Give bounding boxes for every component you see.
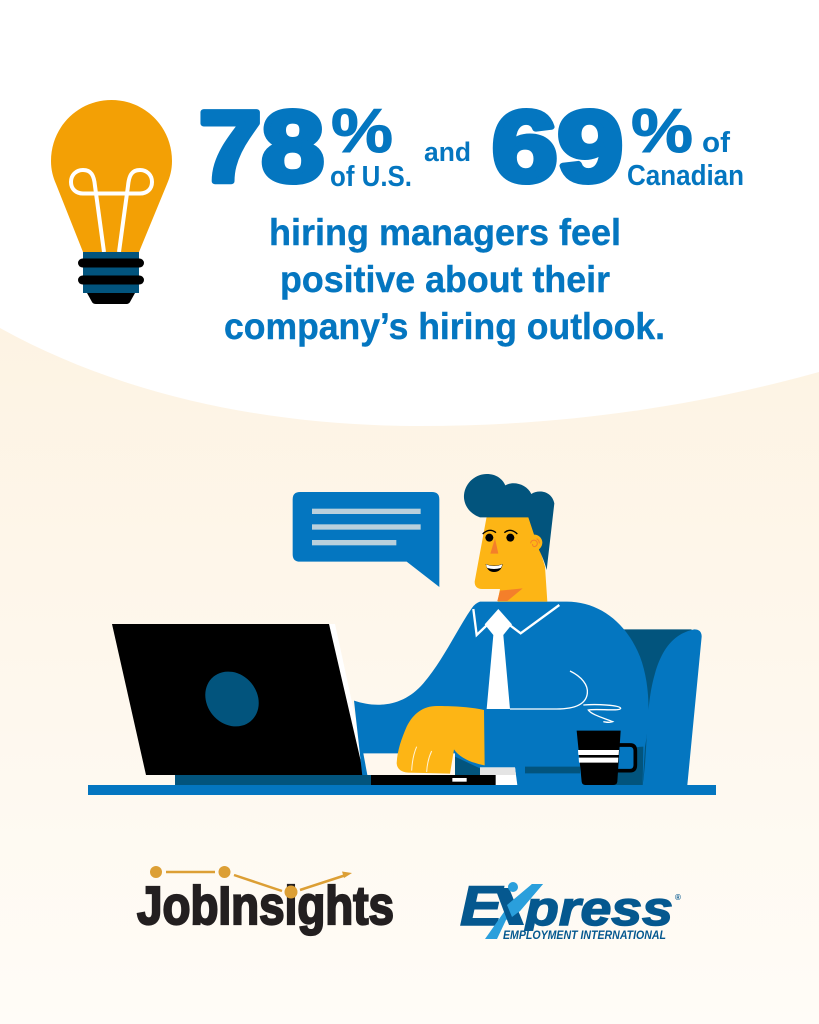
- logo: JobInsights: JobInsights: [137, 876, 394, 936]
- headline statistic: 69% of Canadian: %: [631, 97, 693, 166]
- collar and sleeve lines: [473, 605, 621, 722]
- dark under-arm shade: [455, 747, 643, 785]
- subheading text: [224, 212, 665, 347]
- illustration: man at laptop: [88, 474, 716, 795]
- headline statistic: 69% of Canadian: 69: [492, 91, 623, 203]
- shirt cuff: [363, 753, 455, 775]
- speech bubble: [293, 492, 439, 587]
- coffee mug: [577, 731, 635, 785]
- logo: Express Employment International: [460, 882, 681, 939]
- man figure: [175, 474, 702, 785]
- headline statistic: 78% of U.S.: %: [331, 97, 393, 166]
- headline statistic: 78% of U.S.: 78: [199, 91, 324, 203]
- hand: [397, 706, 485, 774]
- desk: [88, 785, 716, 795]
- headline statistic: 78% of U.S.: [199, 91, 412, 203]
- headline statistic: 69% of Canadian: Canadian: [627, 160, 744, 192]
- headline statistic: 69% of Canadian: [492, 91, 744, 203]
- logo: Express Employment International: press: [523, 883, 673, 936]
- subheading text: company’s hiring outlook.: [224, 306, 665, 347]
- chair: [613, 629, 702, 785]
- neck and face: [475, 517, 547, 602]
- keyboard: [175, 775, 496, 785]
- torso and arm: [354, 602, 649, 785]
- neck shadow: [497, 588, 523, 601]
- laptop screen: [112, 624, 368, 776]
- logo: Express Employment International: E: [460, 874, 504, 937]
- headline statistic: 69% of Canadian: of: [702, 127, 730, 159]
- eyes, brows, nose and mouth: [483, 530, 517, 572]
- hair: [464, 474, 554, 570]
- subheading text: hiring managers feel: [269, 212, 621, 253]
- subheading text: positive about their: [280, 259, 610, 300]
- icon: light bulb: [51, 100, 172, 304]
- logo: Express Employment International: EMPLOYMENT INTERNATIONAL: [503, 930, 666, 942]
- logo: Express Employment International: ®: [675, 893, 681, 902]
- headline statistic: 78% of U.S.: of U.S.: [330, 161, 412, 193]
- tie: [485, 609, 512, 709]
- ear: [526, 535, 542, 551]
- connecting word: and: and: [424, 137, 471, 167]
